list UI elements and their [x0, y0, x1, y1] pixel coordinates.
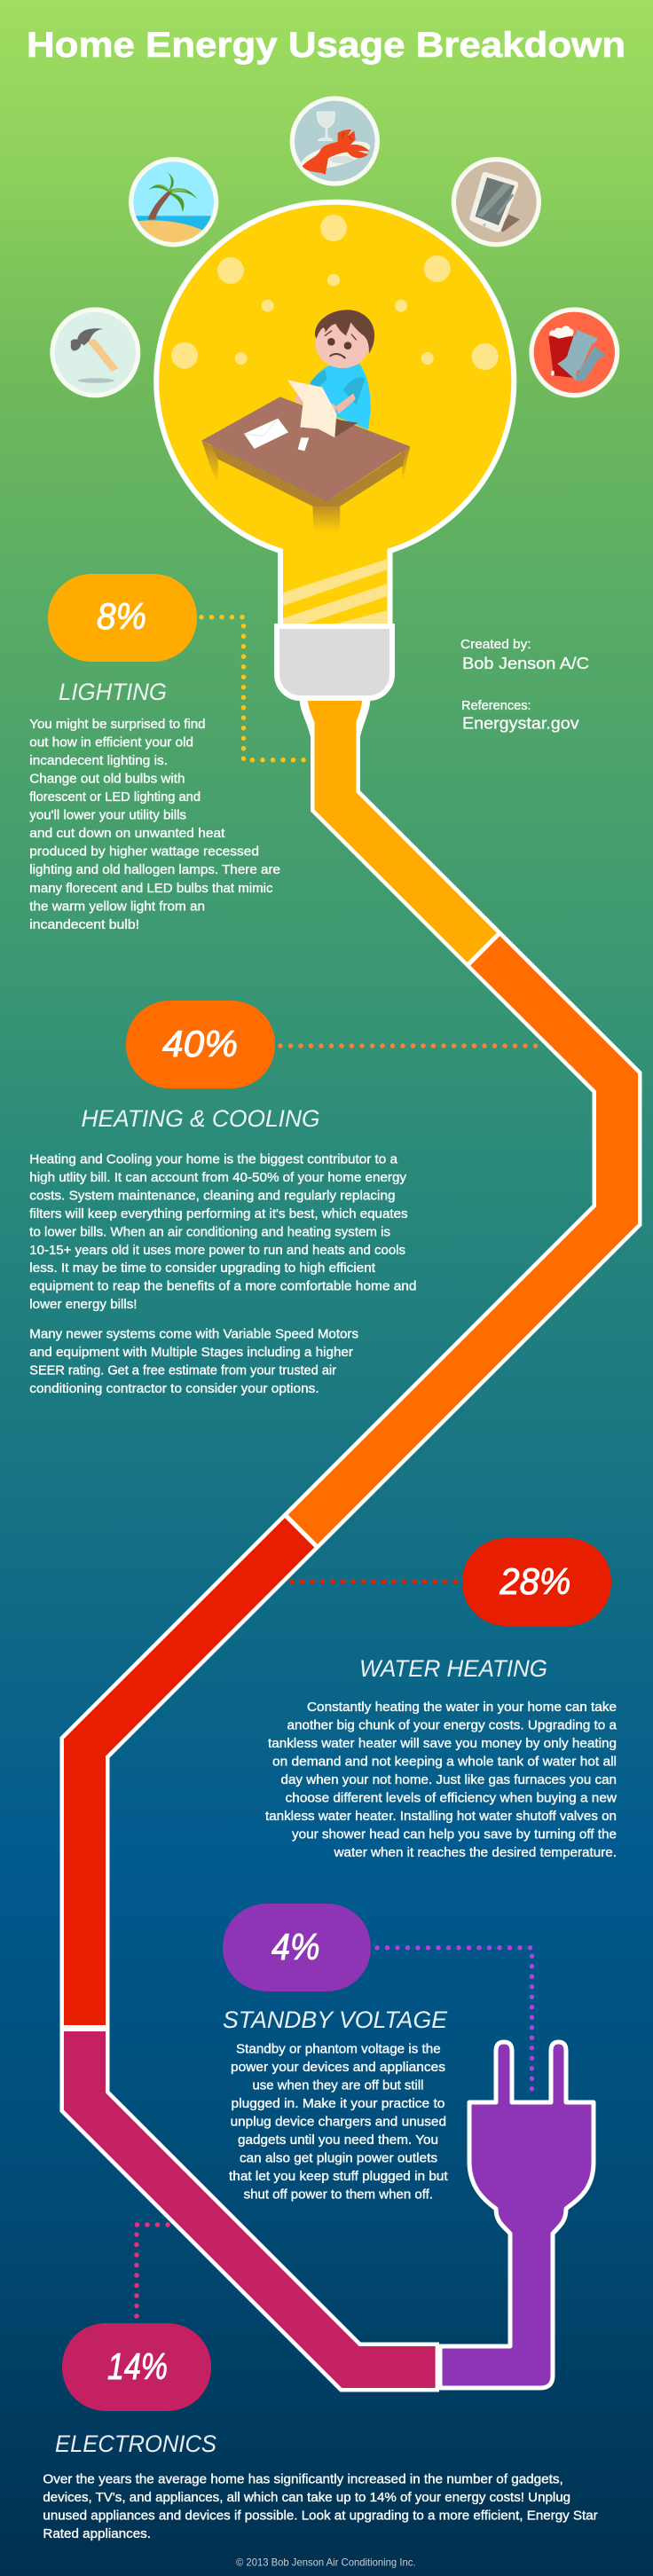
body text: choose different levels of efficiency when buying a new — [286, 1790, 617, 1805]
dotted connector — [201, 617, 306, 760]
body text: day when your not home. Just like gas furnaces you can — [280, 1772, 617, 1787]
badge 8% — [48, 574, 197, 662]
body text — [29, 1151, 417, 1396]
wire segment: heating and cooling — [303, 951, 618, 1529]
body text: many florecent and LED bulbs that mimic — [29, 881, 273, 896]
body text: gadgets until you need them. You — [238, 2132, 438, 2148]
dotted connector — [292, 1579, 458, 1584]
body text: water when it reaches the desired temperature. — [333, 1845, 617, 1860]
body text: use when they are off but still — [252, 2078, 424, 2093]
bulb neck stripes — [283, 559, 388, 624]
badge 28%: 28% — [499, 1560, 570, 1602]
body text: filters will keep everything performing at it's best, which equates — [29, 1206, 408, 1221]
credits: Created by: — [460, 638, 531, 652]
bulb sparkle dots — [171, 215, 499, 370]
wire segment: water heating — [85, 1533, 300, 2025]
icon: smartphone — [452, 157, 541, 247]
plug: standby voltage — [440, 2042, 594, 2388]
heading: LIGHTING — [59, 679, 167, 705]
panel: electronics — [43, 2225, 598, 2541]
body text: Constantly heating the water in your home can take — [307, 1700, 617, 1715]
heading: STANDBY VOLTAGE — [223, 2007, 448, 2033]
body text — [265, 1700, 618, 1860]
icon: popcorn and movie tickets — [529, 307, 619, 397]
body text: You might be surprised to find — [29, 717, 205, 732]
body text: incandecent lighting is. — [29, 753, 168, 768]
body text: incandecent bulb! — [29, 917, 139, 932]
body text: unplug device chargers and unused — [231, 2115, 446, 2130]
torn envelope — [244, 419, 288, 449]
body text: tankless water heater. Installing hot water shutoff valves on — [265, 1809, 617, 1824]
badge 28% — [462, 1538, 611, 1626]
paper bill — [287, 380, 336, 437]
dotted connector — [280, 1043, 539, 1048]
body text: high utlity bill. It can account from 40-50% of your home energy — [29, 1170, 407, 1185]
body text — [29, 717, 280, 932]
panel: standby voltage — [223, 1904, 532, 2202]
bulb glass — [156, 202, 514, 626]
body text: shut off power to them when off. — [244, 2187, 433, 2202]
desk legs — [201, 441, 218, 485]
wire segment: electronics — [85, 2031, 436, 2367]
body text: devices, TV's, and appliances, all which can take up to 14% of your energy costs! Unplug — [43, 2490, 570, 2505]
body text: out how in efficient your old — [29, 734, 193, 750]
heading: HEATING & COOLING — [82, 1105, 319, 1132]
badge 14%: 14% — [107, 2345, 168, 2387]
connecting wire — [85, 696, 618, 2367]
body text: costs. System maintenance, cleaning and regularly replacing — [29, 1188, 396, 1203]
panel: water heating — [265, 1538, 618, 1860]
body text: less. It may be time to consider upgrading to high efficient — [29, 1261, 376, 1276]
credits: Energystar.gov — [462, 715, 579, 733]
dotted connector — [137, 2225, 168, 2318]
body text: Change out old bulbs with — [29, 772, 185, 787]
dotted connector — [377, 1948, 532, 2091]
body text: unused appliances and devices if possible. Look at upgrading to a more efficient, Energy Star — [43, 2509, 598, 2524]
body text: equipment to reap the benefits of a more comfortable home and — [29, 1279, 417, 1294]
body text — [229, 2042, 449, 2202]
title: Home Energy Usage Breakdown — [27, 26, 625, 65]
copyright footer: © 2013 Bob Jenson Air Conditioning Inc. — [236, 2556, 415, 2569]
body text: conditioning contractor to consider your options. — [29, 1381, 319, 1396]
badge 40% — [126, 1001, 275, 1088]
body text: that let you keep stuff plugged in but — [229, 2169, 449, 2184]
credits: Bob Jenson A/C — [462, 655, 589, 672]
body text: plugged in. Make it your practice to — [231, 2096, 445, 2111]
panel: heating and cooling — [29, 1001, 539, 1396]
body text — [43, 2472, 598, 2541]
body text: Over the years the average home has significantly increased in the number of gadgets, — [43, 2472, 563, 2487]
boy head — [315, 318, 370, 368]
body text: Rated appliances. — [43, 2526, 151, 2541]
body text: and cut down on unwanted heat — [29, 826, 225, 841]
credits — [460, 638, 589, 733]
body text: tankless water heater will save you money by only heating — [268, 1736, 617, 1751]
body text: lower energy bills! — [29, 1297, 137, 1312]
icon: palm tree beach — [129, 157, 219, 247]
body text: produced by higher wattage recessed — [29, 844, 259, 860]
body text: power your devices and appliances — [231, 2060, 445, 2075]
boy shirt — [310, 364, 371, 429]
body text: your shower head can help you save by turning off the — [292, 1826, 617, 1842]
badge 4% — [223, 1904, 371, 1991]
bulb base — [277, 626, 392, 698]
body text: SEER rating. Get a free estimate from your trusted air — [29, 1363, 336, 1378]
icon: hammer — [50, 307, 140, 397]
body text: Standby or phantom voltage is the — [236, 2042, 441, 2057]
body text: Many newer systems come with Variable Speed Motors — [29, 1326, 358, 1341]
badge 40%: 40% — [162, 1023, 238, 1064]
credits: References: — [461, 699, 531, 713]
body text: and equipment with Multiple Stages including a higher — [29, 1345, 353, 1360]
heading: WATER HEATING — [359, 1655, 547, 1682]
body text: you'll lower your utility bills — [29, 808, 186, 823]
badge 14% — [62, 2323, 211, 2411]
light bulb — [156, 202, 514, 698]
desk apron — [210, 444, 406, 507]
icon: wine glass and lobster dinner — [290, 96, 380, 186]
wire segment: lighting — [335, 696, 482, 947]
body text: 10-15+ years old it uses more power to run and heats and cools — [29, 1243, 405, 1258]
body text: another big chunk of your energy costs. Upgrading to a — [287, 1717, 618, 1733]
panel: lighting — [29, 574, 306, 932]
body text: to lower bills. When an air conditioning and heating system is — [29, 1224, 390, 1239]
body text: the warm yellow light from an — [29, 899, 205, 914]
illustration: worried boy at desk reading a bill — [201, 310, 410, 532]
heading: ELECTRONICS — [55, 2431, 216, 2457]
arm and hands — [335, 393, 356, 414]
body text: lighting and old hallogen lamps. There are — [29, 862, 280, 877]
desk top — [201, 397, 410, 502]
body text: on demand and not keeping a whole tank of water hot all — [272, 1754, 617, 1769]
badge 8%: 8% — [97, 595, 146, 637]
badge 4%: 4% — [271, 1926, 319, 1967]
body text: can also get plugin power outlets — [240, 2150, 437, 2166]
body text: Heating and Cooling your home is the biggest contributor to a — [29, 1151, 398, 1167]
body text: florescent or LED lighting and — [29, 789, 201, 805]
